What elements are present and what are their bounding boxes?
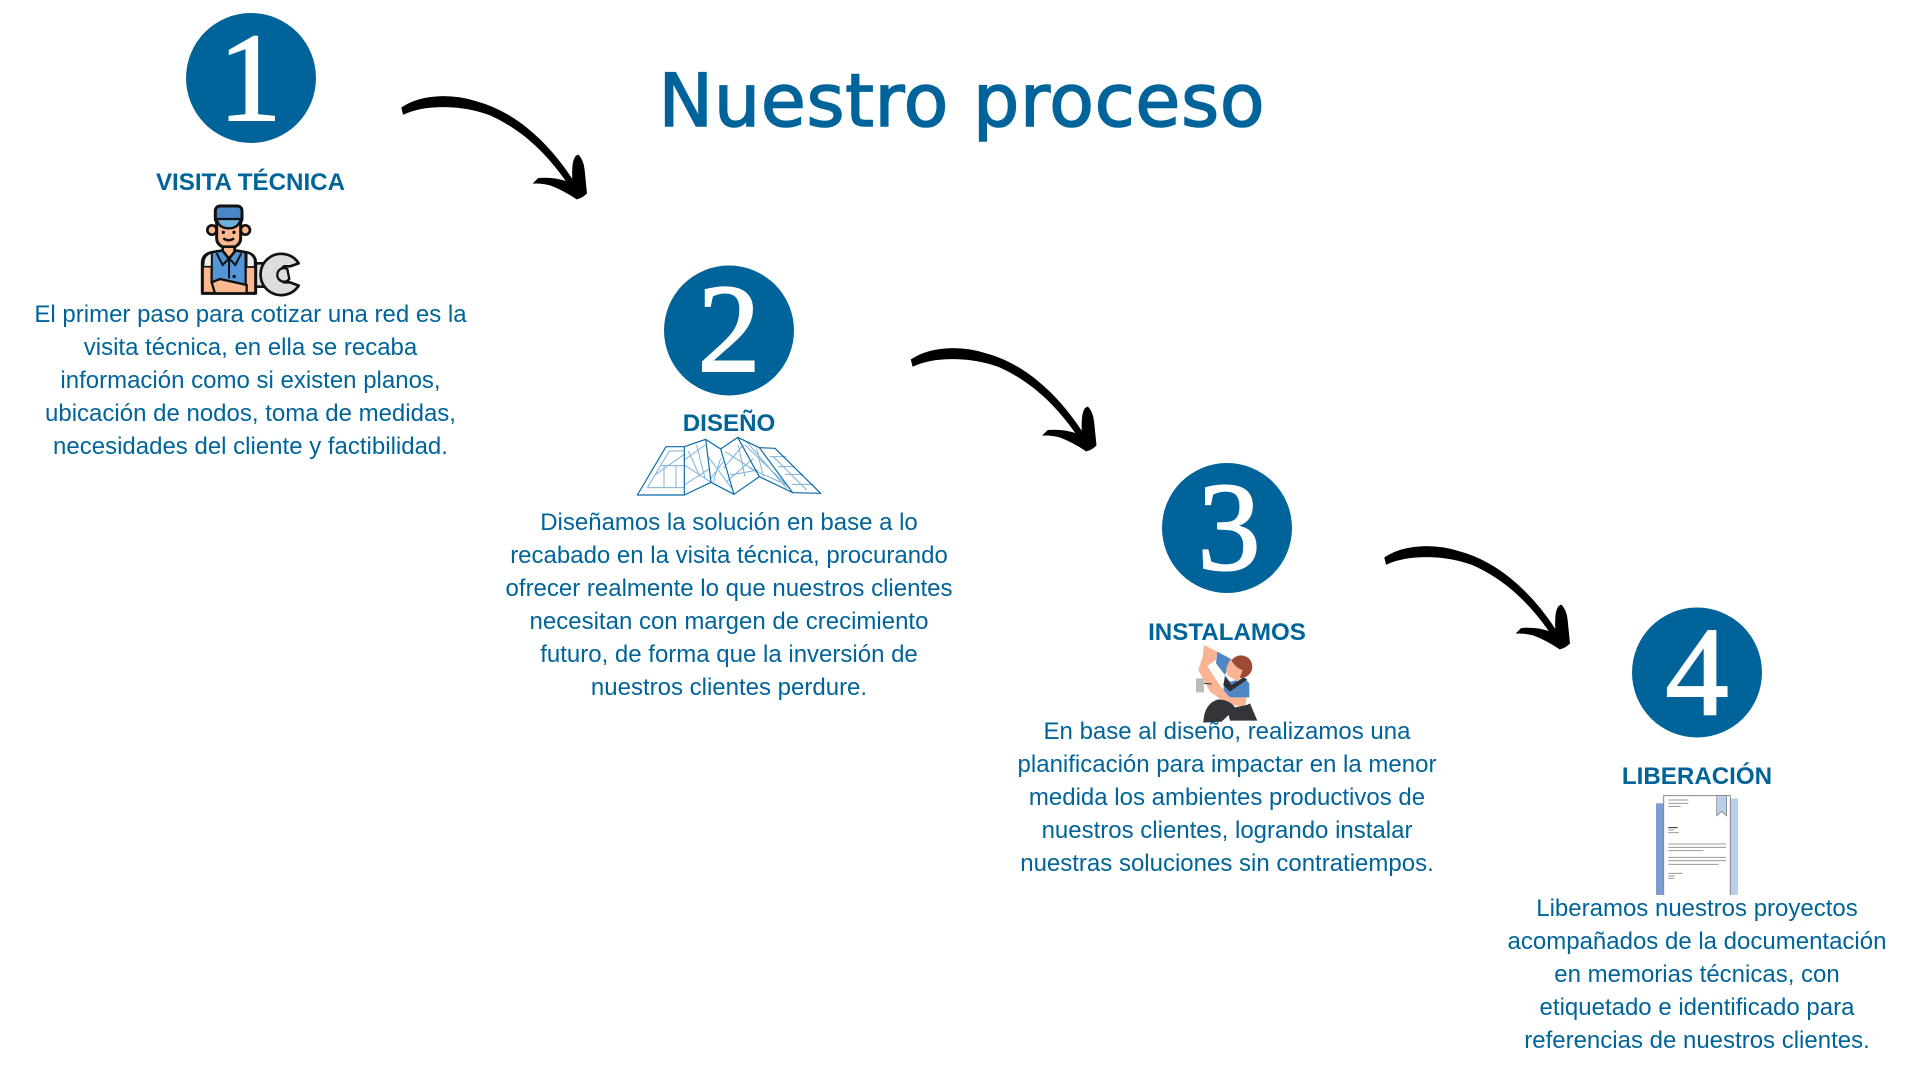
icon: worker installing outlet bbox=[1196, 645, 1257, 723]
panel: step 2 diseño bbox=[506, 260, 952, 701]
panel: step 4 liberación bbox=[1508, 603, 1886, 1054]
icon: folded blueprint map bbox=[637, 437, 821, 495]
text: diseño description: futuro, de forma que la inversión de bbox=[540, 641, 918, 668]
text: liberación description: Liberamos nuestros proyectos bbox=[1536, 895, 1858, 922]
text: visita técnica description: información como si existen planos, bbox=[60, 367, 441, 394]
arrow: step 2 to step 3 bbox=[911, 349, 1096, 451]
text: visita técnica description: visita técnica, en ella se recaba bbox=[84, 334, 418, 361]
number badge 3: 3 bbox=[1198, 458, 1260, 598]
number badge 4: 4 bbox=[1666, 603, 1728, 742]
text: liberación description: en memorias técnicas, con bbox=[1554, 961, 1840, 988]
number badge 3 bbox=[1162, 458, 1292, 598]
text: diseño description: necesitan con margen de crecimiento bbox=[530, 608, 928, 635]
text: visita técnica description: ubicación de nodos, toma de medidas, bbox=[45, 400, 456, 427]
heading: liberación: LIBERACIÓN bbox=[1622, 762, 1772, 790]
text: visita técnica description: necesidades del cliente y factibilidad. bbox=[53, 433, 448, 460]
text: diseño description bbox=[506, 509, 952, 701]
text: liberación description: etiquetado e identificado para bbox=[1540, 994, 1855, 1021]
icon: mechanic with wrench bbox=[202, 206, 299, 295]
text: instalamos description: medida los ambientes productivos de bbox=[1029, 784, 1425, 811]
number badge 2 bbox=[664, 260, 794, 399]
text: liberación description: acompañados de la documentación bbox=[1508, 928, 1886, 955]
number badge 4 bbox=[1632, 603, 1762, 742]
text: visita técnica description bbox=[34, 301, 467, 460]
heading: diseño: DISEÑO bbox=[683, 409, 775, 437]
number badge 1 bbox=[186, 9, 316, 148]
text: visita técnica description: El primer paso para cotizar una red es la bbox=[34, 301, 467, 328]
text: instalamos description: nuestras soluciones sin contratiempos. bbox=[1020, 850, 1434, 877]
panel: step 1 visita técnica bbox=[34, 9, 467, 460]
text: diseño description: Diseñamos la solución en base a lo bbox=[540, 509, 918, 536]
number badge 1: 1 bbox=[218, 9, 282, 148]
number badge 2: 2 bbox=[698, 260, 760, 399]
text: liberación description: referencias de nuestros clientes. bbox=[1524, 1027, 1870, 1054]
text: instalamos description: nuestros clientes, logrando instalar bbox=[1042, 817, 1412, 844]
text: instalamos description: planificación para impactar en la menor bbox=[1018, 751, 1436, 778]
arrow: step 3 to step 4 bbox=[1385, 547, 1570, 649]
text: instalamos description: En base al diseño, realizamos una bbox=[1044, 718, 1411, 745]
heading: instalamos: INSTALAMOS bbox=[1148, 619, 1306, 646]
text: liberación description bbox=[1508, 895, 1886, 1054]
arrow: step 1 to step 2 bbox=[402, 97, 587, 199]
text: instalamos description bbox=[1018, 718, 1436, 877]
panel: step 3 instalamos bbox=[1018, 458, 1436, 877]
title: Nuestro proceso bbox=[658, 59, 1264, 144]
heading: visita técnica: VISITA TÉCNICA bbox=[156, 168, 345, 196]
icon: document with bookmark bbox=[1656, 796, 1738, 895]
text: diseño description: nuestros clientes perdure. bbox=[591, 674, 867, 701]
text: diseño description: ofrecer realmente lo que nuestros clientes bbox=[506, 575, 952, 602]
text: diseño description: recabado en la visita técnica, procurando bbox=[510, 542, 948, 569]
